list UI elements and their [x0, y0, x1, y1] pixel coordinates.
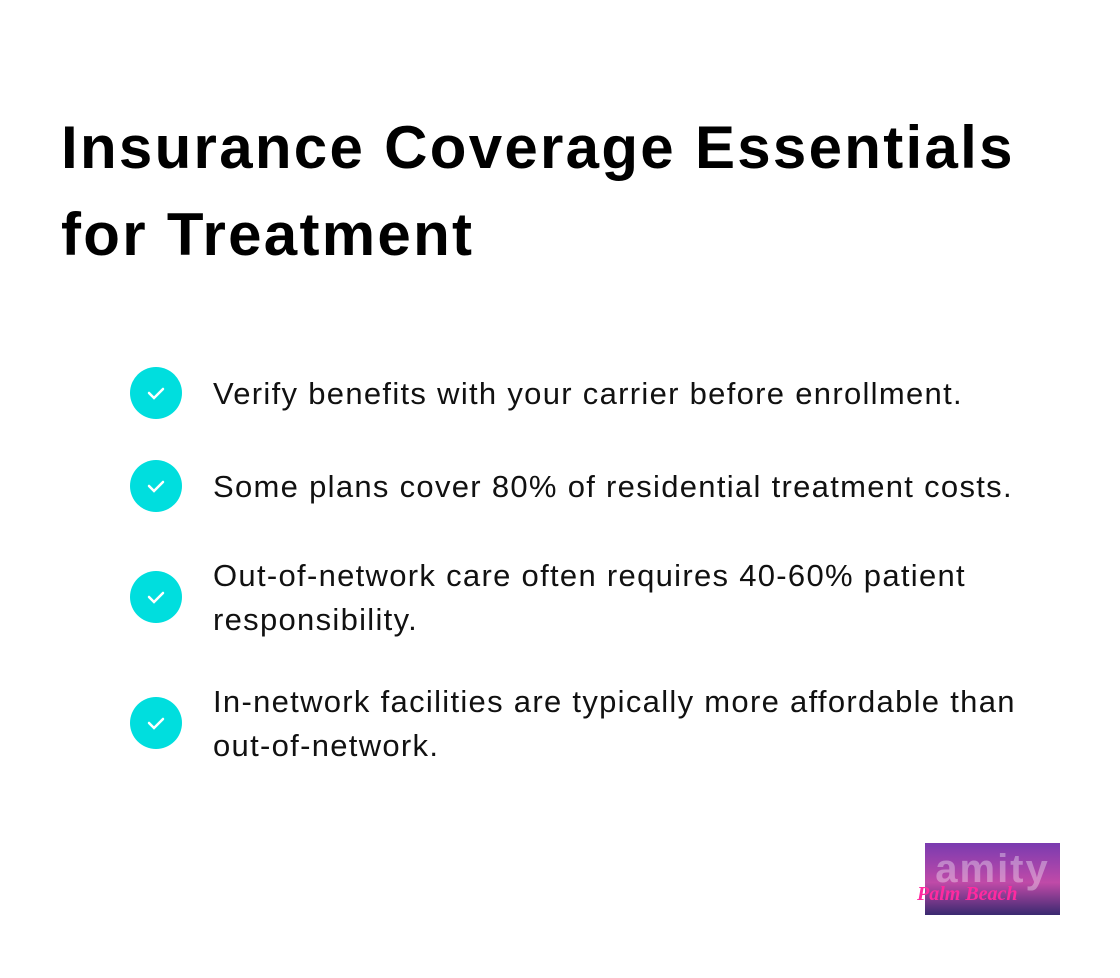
text 4	[213, 684, 1016, 763]
text 3: responsibility.	[213, 602, 418, 637]
icon: check	[130, 460, 182, 512]
icon: check	[130, 697, 182, 749]
text 2: Some plans cover 80% of residential treatment costs.	[213, 469, 1013, 504]
text 4: out-of-network.	[213, 728, 439, 763]
logo: Palm Beach	[917, 883, 1018, 905]
text 4: In-network facilities are typically more affordable than	[213, 684, 1016, 719]
title	[61, 114, 1015, 268]
logo	[925, 843, 1060, 915]
text 3	[213, 558, 966, 637]
logo: amity	[935, 847, 1050, 891]
text 3: Out-of-network care often requires 40-60% patient	[213, 558, 966, 593]
text 1: Verify benefits with your carrier before enrollment.	[213, 376, 963, 411]
title: for Treatment	[61, 201, 474, 268]
title: Insurance Coverage Essentials	[61, 114, 1015, 181]
item 3	[130, 558, 966, 637]
item 2	[130, 460, 1013, 512]
icon: check	[130, 367, 182, 419]
item 1	[130, 367, 963, 419]
icon: check	[130, 571, 182, 623]
item 4	[130, 684, 1016, 763]
